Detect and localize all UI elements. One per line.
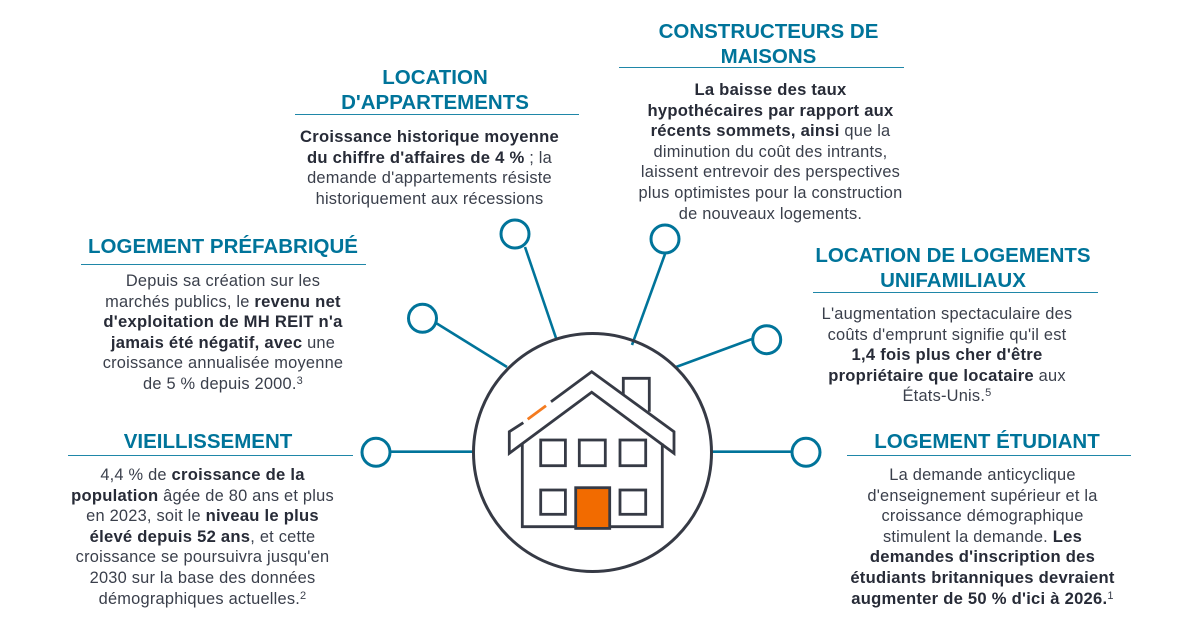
body text: vieillissement: 2030 sur la base des données	[90, 569, 315, 587]
body text: constructeurs: de nouveaux logements.	[679, 205, 862, 223]
body text: étudiant: stimulent la demande. Les	[883, 527, 1082, 546]
body text: préfabriqué: d'exploitation de MH REIT n'a	[103, 312, 343, 331]
body text: unifamiliaux: L'augmentation spectaculaire des	[822, 305, 1072, 323]
panel: vieillissement	[71, 430, 334, 608]
body text: unifamiliaux: 1,4 fois plus cher d'être	[852, 345, 1042, 364]
heading: constructeurs de maisons: CONSTRUCTEURS DE	[659, 20, 878, 43]
body text: vieillissement: population âgée de 80 ans et plus	[71, 486, 334, 505]
body text: préfabriqué: croissance annualisée moyenne	[103, 354, 343, 372]
body text: préfabriqué: de 5 % depuis 2000.3	[143, 375, 303, 393]
body text: appartements	[300, 127, 559, 208]
body text: étudiant: La demande anticyclique	[889, 466, 1076, 484]
heading: location de logements unifamiliaux: UNIFAMILIAUX	[880, 269, 1026, 292]
body text: vieillissement: en 2023, soit le niveau le plus	[86, 506, 319, 525]
body text: préfabriqué: jamais été négatif, avec une	[111, 333, 335, 352]
body text: constructeurs	[639, 80, 902, 223]
body text: vieillissement: croissance se poursuivra jusqu'en	[76, 548, 329, 566]
heading: location de logements unifamiliaux	[815, 244, 1091, 292]
body text: étudiant: étudiants britanniques devraient	[850, 568, 1115, 587]
body text: appartements: Croissance historique moyenne	[300, 127, 559, 146]
heading: location d'appartements: LOCATION	[382, 66, 488, 89]
large circle	[474, 334, 712, 572]
heading: location d'appartements	[341, 66, 529, 114]
body text: appartements: du chiffre d'affaires de 4 % ; la	[307, 148, 552, 167]
body text: préfabriqué	[103, 272, 343, 393]
body text: unifamiliaux: propriétaire que locataire aux	[828, 366, 1066, 385]
panel: location de logements unifamiliaux	[815, 244, 1091, 405]
body text: unifamiliaux	[822, 305, 1072, 405]
body text: vieillissement	[71, 465, 334, 608]
heading: location de logements unifamiliaux: LOCATION DE LOGEMENTS	[815, 244, 1091, 267]
heading: constructeurs de maisons: MAISONS	[721, 45, 816, 68]
roof accent	[528, 406, 546, 419]
body text: unifamiliaux: coûts d'emprunt signifie qu'il est	[828, 326, 1066, 344]
body text: unifamiliaux: États-Unis.5	[903, 387, 991, 405]
body text: constructeurs: plus optimistes pour la construction	[639, 184, 902, 202]
heading: logement étudiant: LOGEMENT ÉTUDIANT	[874, 430, 1100, 453]
body text: constructeurs: La baisse des taux	[694, 80, 847, 99]
icon: house	[509, 372, 674, 528]
connector lines and nodes	[362, 220, 820, 466]
heading: location d'appartements: D'APPARTEMENTS	[341, 91, 529, 114]
body text: vieillissement: élevé depuis 52 ans, et cette	[90, 527, 315, 546]
panel: location d'appartements	[300, 66, 559, 208]
body text: étudiant: augmenter de 50 % d'ici à 2026.1	[851, 589, 1114, 608]
panel: logement préfabriqué	[88, 235, 358, 393]
body text: appartements: historiquement aux récessions	[316, 190, 543, 208]
body text: vieillissement: démographiques actuelles.2	[99, 590, 306, 608]
panel: constructeurs de maisons	[639, 20, 902, 223]
body text: étudiant: demandes d'inscription des	[870, 547, 1095, 566]
heading: constructeurs de maisons	[659, 20, 878, 68]
door	[576, 488, 610, 528]
body text: constructeurs: récents sommets, ainsi que la	[651, 121, 890, 140]
heading: logement préfabriqué: LOGEMENT PRÉFABRIQUÉ	[88, 235, 358, 258]
body text: étudiant: d'enseignement supérieur et la	[867, 487, 1098, 505]
panel: logement étudiant	[850, 430, 1115, 608]
body text: étudiant	[850, 466, 1115, 608]
body text: constructeurs: diminution du coût des intrants,	[654, 143, 887, 161]
body text: étudiant: croissance démographique	[881, 507, 1084, 525]
heading: vieillissement: VIEILLISSEMENT	[124, 430, 292, 453]
body text: préfabriqué: marchés publics, le revenu net	[105, 292, 341, 311]
body text: vieillissement: 4,4 % de croissance de la	[100, 465, 305, 484]
body text: constructeurs: hypothécaires par rapport aux	[647, 101, 894, 120]
body text: constructeurs: laissent entrevoir des perspectives	[641, 163, 900, 181]
body text: appartements: demande d'appartements résiste	[307, 169, 552, 187]
body text: préfabriqué: Depuis sa création sur les	[126, 272, 320, 290]
